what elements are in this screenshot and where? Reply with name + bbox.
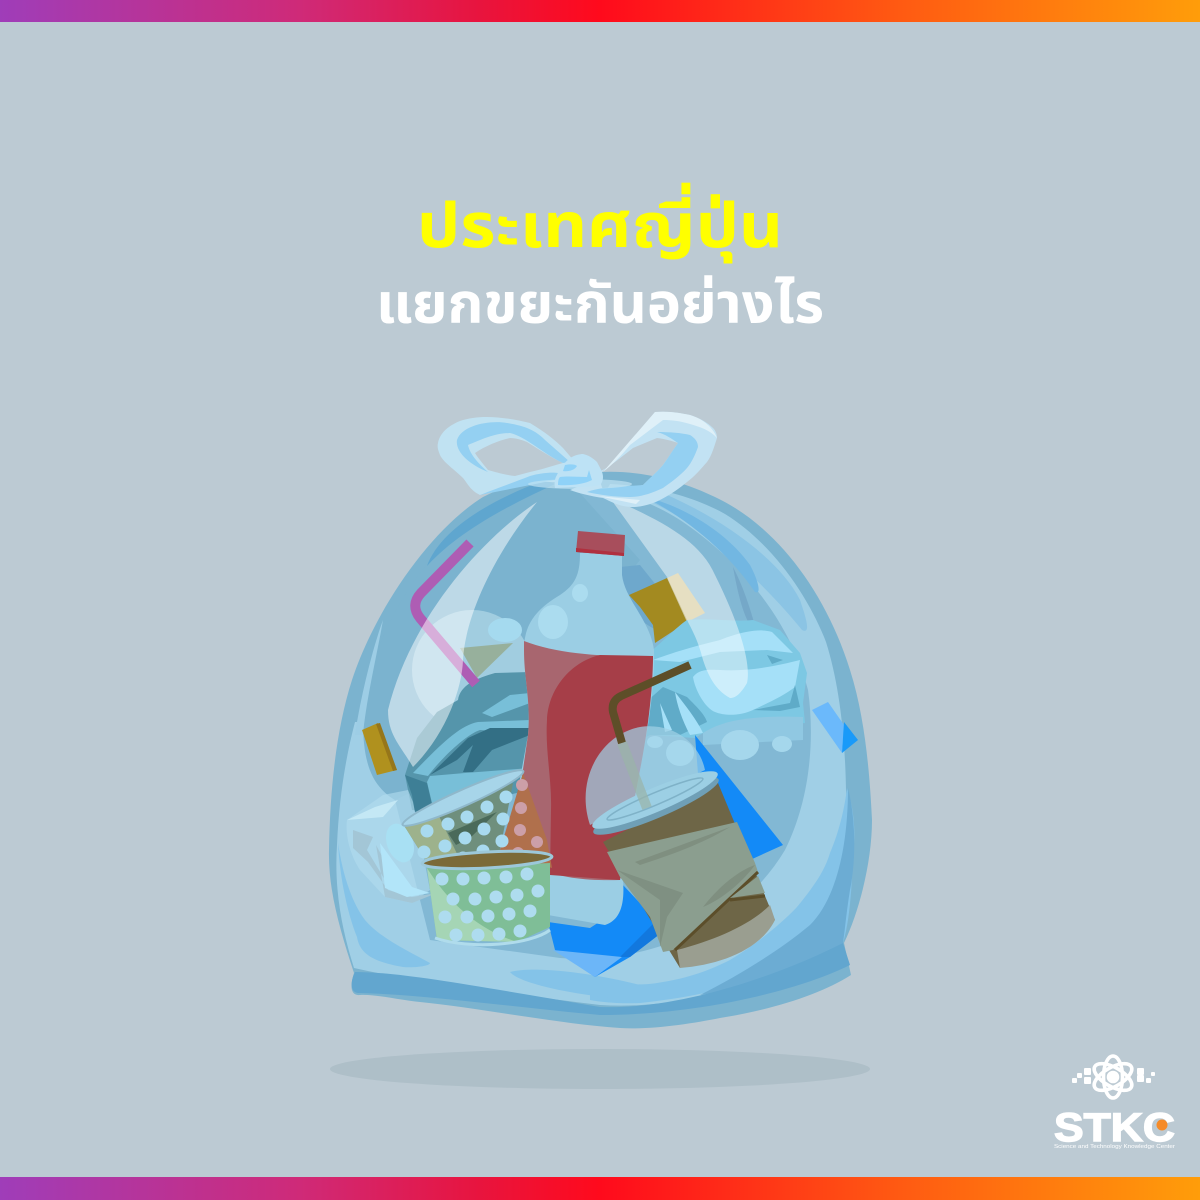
STKC logo — [1054, 1056, 1175, 1150]
knot inner — [558, 470, 592, 485]
yellow box — [362, 723, 397, 775]
logo wordmark: STKC — [1054, 1106, 1175, 1150]
left loop upper band — [457, 422, 570, 472]
tie bow — [438, 412, 717, 507]
gold bottle behind — [619, 565, 705, 643]
title: แยกขยะกันอย่างไร — [376, 272, 824, 335]
olive polka cup — [399, 764, 527, 867]
bag outer shell — [329, 472, 872, 1028]
lower bow strand — [598, 496, 640, 504]
title: ประเทศญี่ปุ่น — [417, 182, 783, 263]
blue folder right — [695, 735, 783, 860]
right loop band — [587, 432, 698, 497]
left loop lower band — [480, 473, 558, 495]
right loop top sheen — [603, 412, 717, 472]
logo tagline: Science and Technology Knowledge Center — [1054, 1144, 1175, 1150]
knot — [555, 454, 603, 488]
bag sheen left — [388, 502, 537, 767]
top gradient bar — [0, 0, 1200, 22]
bag sheen right — [610, 498, 748, 698]
strand across knot — [528, 479, 632, 489]
right lower lobe — [590, 788, 854, 1003]
clear domed cup left — [412, 610, 532, 730]
bottom band — [352, 943, 850, 1015]
bottom centre lobe — [510, 970, 640, 1000]
garbage bag illustration — [329, 412, 872, 1028]
left lower lobe — [338, 843, 430, 967]
crumpled plastic right — [625, 619, 807, 760]
bag interior darker zone — [363, 482, 811, 959]
left loop — [438, 417, 580, 495]
left edge highlight strip — [355, 620, 383, 735]
logo orange dot — [1156, 1120, 1168, 1130]
logo atom icon — [1090, 1056, 1136, 1098]
left top dark fold — [427, 480, 555, 566]
blue right tag — [812, 702, 858, 753]
knot fold — [563, 464, 577, 471]
crumpled plastic left — [347, 790, 437, 903]
right top folds — [640, 488, 807, 633]
bottle — [518, 531, 654, 925]
orange cup wedge — [500, 773, 552, 868]
bag light inner layer — [336, 484, 850, 1006]
title — [376, 182, 824, 335]
right loop — [570, 412, 717, 507]
right lobe shade — [700, 788, 854, 995]
blue folder bottom — [548, 885, 665, 977]
bottom gradient bar — [0, 1177, 1200, 1200]
pink straw — [415, 543, 476, 684]
coffee cup — [586, 665, 775, 968]
logo side dots — [1072, 1068, 1155, 1084]
teal plate — [405, 672, 530, 812]
green polka cup — [422, 849, 552, 945]
ground shadow — [330, 1049, 870, 1089]
